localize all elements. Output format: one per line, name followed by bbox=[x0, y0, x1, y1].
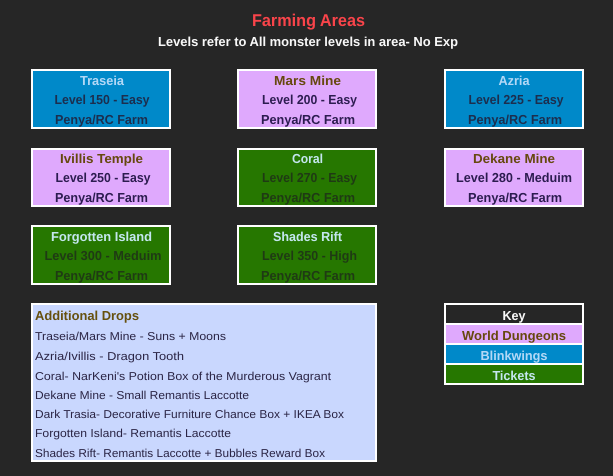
panel: Shades Rift bbox=[238, 226, 376, 284]
text: Forgotten Island drops: Forgotten Island- Remantis Laccotte bbox=[35, 428, 231, 440]
subtitle: Levels refer to All monster levels in area- No Exp bbox=[158, 34, 458, 49]
panel: Coral: Level 270 - Easy bbox=[262, 170, 358, 185]
panel: Shades Rift: Level 350 - High bbox=[262, 248, 357, 263]
text: Dekane Mine drops: Dekane Mine - Small Remantis Laccotte bbox=[35, 390, 249, 402]
panel: Shades Rift: Shades Rift bbox=[273, 229, 343, 244]
panel: Traseia: Penya/RC Farm bbox=[55, 112, 148, 127]
panel: Mars Mine: Mars Mine bbox=[274, 73, 341, 88]
panel: Forgotten Island: Forgotten Island bbox=[51, 229, 152, 244]
panel: Traseia: Level 150 - Easy bbox=[54, 92, 150, 107]
panel: Forgotten Island: Penya/RC Farm bbox=[55, 268, 148, 283]
panel: Azria: Penya/RC Farm bbox=[468, 112, 562, 127]
panel: Dekane Mine bbox=[445, 149, 583, 206]
panel: Azria: Level 225 - Easy bbox=[468, 92, 564, 107]
key: Blinkwings: Blinkwings bbox=[480, 348, 548, 363]
panel: Mars Mine bbox=[238, 70, 376, 128]
key: Tickets: Tickets bbox=[492, 368, 536, 383]
text: Dark Trasia drops: Dark Trasia- Decorative Furniture Chance Box + IKEA Box bbox=[35, 409, 344, 421]
text: Shades Rift drops: Shades Rift- Remantis Laccotte + Bubbles Reward Box bbox=[35, 448, 325, 460]
text: Azria and Ivillis drops: Azria/Ivillis - Dragon Tooth bbox=[35, 351, 184, 363]
panel: Forgotten Island bbox=[32, 226, 170, 284]
panel: Coral bbox=[238, 149, 376, 206]
key: World Dungeons: World Dungeons bbox=[462, 328, 566, 343]
text: Traseia and Mars Mine drops: Traseia/Mars Mine - Suns + Moons bbox=[35, 331, 226, 343]
panel: Forgotten Island: Level 300 - Meduim bbox=[44, 248, 162, 263]
panel: Ivillis Temple: Ivillis Temple bbox=[60, 151, 143, 166]
panel: Coral: Coral bbox=[292, 151, 323, 166]
heading: additional drops: Additional Drops bbox=[35, 308, 139, 323]
panel: Shades Rift: Penya/RC Farm bbox=[261, 268, 355, 283]
panel: Mars Mine: Level 200 - Easy bbox=[262, 92, 358, 107]
title: Farming Areas bbox=[252, 11, 365, 30]
text: Coral drops: Coral- NarKeni's Potion Box of the Murderous Vagrant bbox=[35, 371, 332, 383]
panel: Coral: Penya/RC Farm bbox=[261, 190, 355, 205]
panel: Dekane Mine: Dekane Mine bbox=[473, 151, 555, 166]
panel: Ivillis Temple: Penya/RC Farm bbox=[55, 190, 148, 205]
panel: Traseia bbox=[32, 70, 170, 128]
panel: Ivillis Temple: Level 250 - Easy bbox=[56, 170, 151, 185]
legend: key bbox=[444, 303, 584, 385]
panel: Azria: Azria bbox=[498, 73, 530, 88]
panel: Dekane Mine: Penya/RC Farm bbox=[468, 190, 562, 205]
key heading: Key bbox=[502, 308, 526, 323]
panel: Mars Mine: Penya/RC Farm bbox=[261, 112, 355, 127]
panel: Dekane Mine: Level 280 - Meduim bbox=[456, 170, 572, 185]
panel: additional drops bbox=[32, 304, 376, 461]
panel: Traseia: Traseia bbox=[80, 73, 125, 88]
panel: Ivillis Temple bbox=[32, 149, 170, 206]
panel: Azria bbox=[445, 70, 583, 128]
